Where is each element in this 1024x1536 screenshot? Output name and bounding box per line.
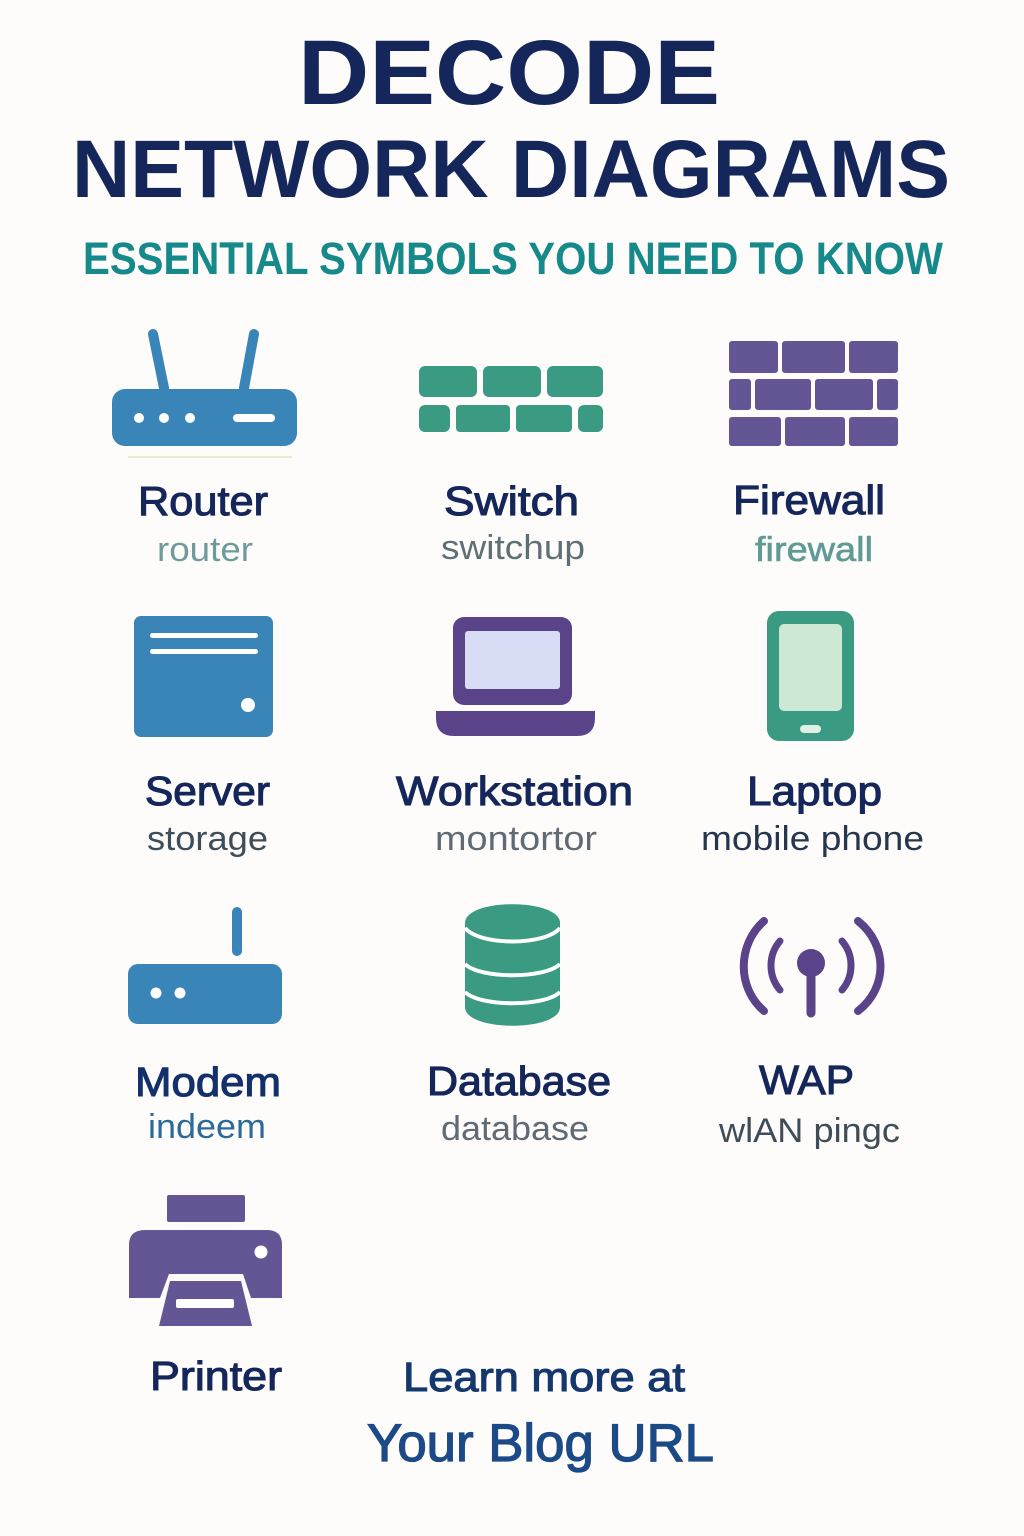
sublabel: server: storage: [147, 820, 268, 858]
icon: router: [112, 334, 297, 458]
icon: modem: [128, 912, 282, 1024]
sublabel: laptop: mobile phone: [701, 820, 924, 858]
call to action: [367, 1354, 714, 1473]
panel: switch: [419, 366, 603, 567]
panel: router: [112, 334, 297, 569]
icon: mobile phone: [767, 611, 854, 741]
panel: server: [134, 616, 273, 858]
panel: database: [427, 904, 611, 1148]
label: laptop: Laptop: [747, 768, 882, 814]
panel: printer: [129, 1195, 282, 1399]
sublabel: workstation: montortor: [435, 820, 597, 858]
icon: database: [465, 904, 560, 1026]
call to action: Learn more at: [403, 1354, 686, 1400]
panel: firewall: [729, 341, 898, 569]
label: firewall: Firewall: [733, 477, 885, 523]
icon: printer: [129, 1195, 282, 1326]
sublabel: wap: wlAN pingc: [718, 1112, 900, 1150]
icon: firewall: [729, 341, 898, 446]
call to action: Your Blog URL: [367, 1414, 714, 1473]
icon: laptop workstation: [436, 617, 595, 736]
icon: switch: [419, 366, 603, 432]
title: DECODE: [298, 22, 720, 124]
panel: wap: [718, 921, 900, 1150]
panel: modem: [128, 912, 282, 1146]
label: switch: Switch: [444, 478, 579, 524]
label: modem: Modem: [135, 1059, 281, 1105]
label: wap: WAP: [759, 1057, 854, 1103]
label: database: Database: [427, 1058, 611, 1104]
sublabel: switch: switchup: [441, 529, 585, 567]
sublabel: database: database: [441, 1110, 589, 1148]
title: NETWORK DIAGRAMS: [72, 124, 950, 215]
sublabel: modem: indeem: [148, 1108, 266, 1146]
icon: wireless access point: [744, 921, 880, 1013]
panel: laptop: [701, 611, 924, 858]
sublabel: firewall: firewall: [755, 531, 873, 569]
title: [72, 22, 950, 215]
panel: workstation: [396, 617, 633, 858]
sublabel: router: router: [157, 531, 253, 569]
subtitle: ESSENTIAL SYMBOLS YOU NEED TO KNOW: [83, 233, 943, 284]
label: printer: Printer: [150, 1353, 282, 1399]
label: workstation: Workstation: [396, 768, 633, 814]
label: server: Server: [145, 768, 270, 814]
label: router: Router: [138, 478, 268, 524]
icon: server: [134, 616, 273, 737]
